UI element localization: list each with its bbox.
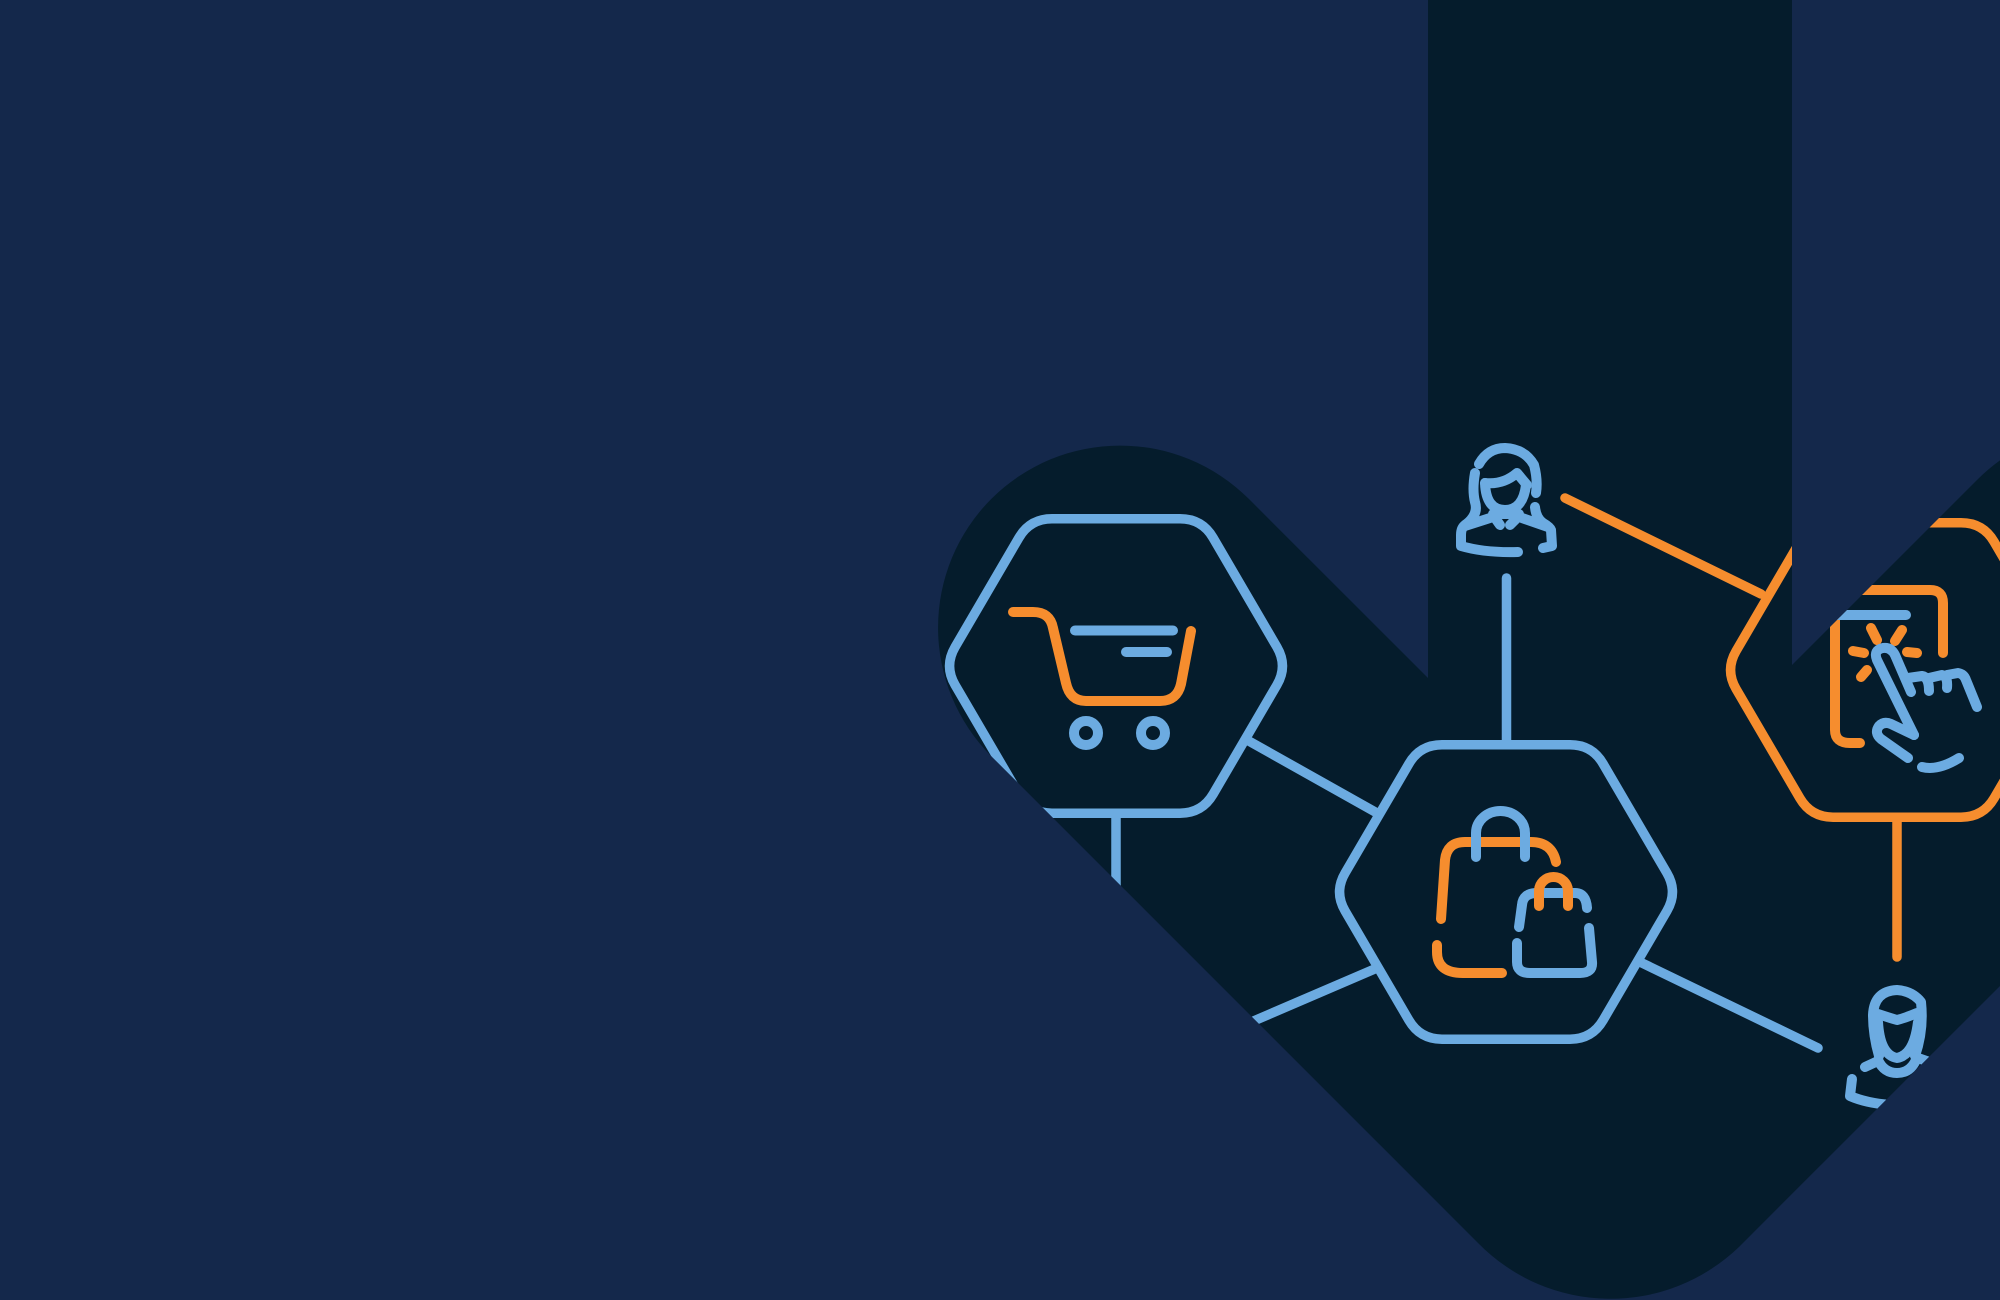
connector: cart down: [1111, 818, 1121, 886]
connector: bag hub lower left: [1252, 965, 1376, 1024]
icon: touch screen hand: [1825, 590, 1977, 768]
network diagram: [950, 448, 2000, 1105]
connector: cart to bag hub: [1247, 740, 1377, 813]
icon: man: [1850, 990, 1935, 1105]
hexagon: shopping bags: [1340, 745, 1672, 1039]
icon: shopping cart: [1013, 612, 1191, 745]
connector: woman to touch hexagon: [1565, 498, 1761, 594]
icon: shopping bags: [1437, 811, 1592, 973]
icon: woman: [1461, 448, 1552, 552]
connector: woman to bag hub: [1502, 578, 1511, 742]
hexagon: touch: [1731, 523, 2000, 817]
connector: touch hexagon to man: [1892, 820, 1902, 957]
connector: bag hub to man: [1642, 963, 1818, 1048]
dark chevron band: [938, 0, 2000, 1299]
hexagon: cart: [950, 519, 1282, 813]
